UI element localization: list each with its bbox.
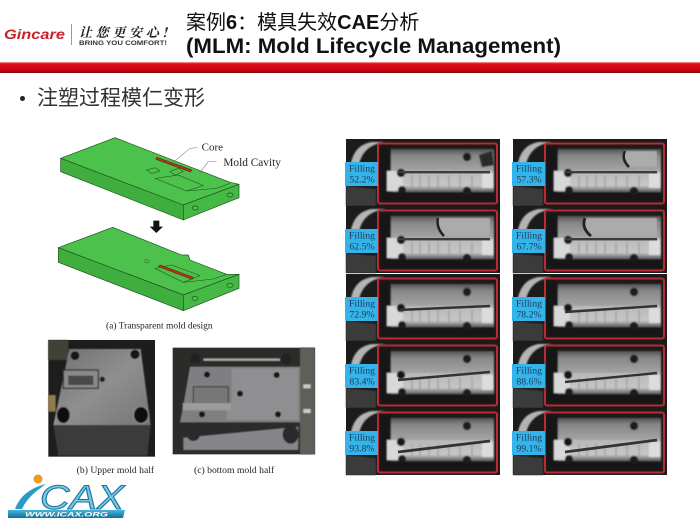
frame: filling 67.7%: Filling xyxy=(516,231,542,242)
frame: filling 99.1%: Filling xyxy=(516,433,542,444)
swoosh of the letter i xyxy=(15,484,46,509)
frame: filling 83.4% xyxy=(345,341,500,408)
photo: upper mold half xyxy=(48,340,155,457)
frame: filling 88.6% xyxy=(512,341,667,408)
frame: filling 52.2% xyxy=(345,139,500,206)
panel: filling sequence left column xyxy=(345,139,500,475)
frame: filling 72.9% xyxy=(345,274,500,341)
frame: filling 93.8%: 93.8% xyxy=(349,443,375,454)
url text: WWW.ICAX.ORG xyxy=(25,512,108,518)
frame: filling 57.3%: 57.3% xyxy=(516,174,542,185)
frame: filling 62.5% xyxy=(345,206,500,273)
frame: filling 57.3%: Filling xyxy=(516,164,542,175)
frame: filling 83.4%: Filling xyxy=(349,366,375,377)
label: mold cavity: Mold Cavity xyxy=(223,157,281,169)
logo: Gincare xyxy=(4,22,168,47)
frame: filling 72.9%: Filling xyxy=(349,299,375,310)
frame: filling 62.5%: 62.5% xyxy=(349,241,375,252)
photos: mold halves xyxy=(48,340,315,476)
title line 1: 案例6：模具失效CAE分析 xyxy=(186,11,419,34)
frame: filling 83.4%: 83.4% xyxy=(349,376,375,387)
frame: filling 67.7% xyxy=(512,206,667,273)
frame: filling 52.2%: Filling xyxy=(349,164,375,175)
frame: filling 88.6%: 88.6% xyxy=(516,376,542,387)
url bar xyxy=(8,510,125,518)
wordmark: CAX xyxy=(40,479,126,517)
frame: filling 99.1% xyxy=(512,408,667,475)
frame: filling 78.2%: 78.2% xyxy=(516,309,542,320)
logo slogan english: BRING YOU COMFORT! xyxy=(79,40,167,47)
orange ball xyxy=(34,474,42,484)
frame: filling 99.1%: 99.1% xyxy=(516,443,542,454)
bullet heading: 注塑过程模仁变形 xyxy=(37,87,205,110)
down arrow xyxy=(150,221,163,233)
frame: filling 72.9%: 72.9% xyxy=(349,309,375,320)
logo: ICAX xyxy=(8,474,126,518)
frame: filling 52.2%: 52.2% xyxy=(349,174,375,185)
label leader lines xyxy=(173,148,217,173)
frame: filling 78.2%: Filling xyxy=(516,299,542,310)
panel: filling sequence right column xyxy=(512,139,667,475)
frame: filling 57.3% xyxy=(512,139,667,206)
frame: filling 93.8% xyxy=(345,408,500,475)
mold with core below xyxy=(58,227,239,311)
frame: filling 67.7%: 67.7% xyxy=(516,241,542,252)
mold with core above xyxy=(61,138,239,220)
caption b: (b) Upper mold half xyxy=(77,465,155,476)
frame: filling 62.5%: Filling xyxy=(349,231,375,242)
diagram: transparent mold design xyxy=(58,138,281,332)
label: core: Core xyxy=(202,141,223,153)
caption a: (a) Transparent mold design xyxy=(106,321,213,332)
frame: filling 78.2% xyxy=(512,274,667,341)
title line 2: (MLM: Mold Lifecycle Management) xyxy=(186,34,561,58)
photo: bottom mold half xyxy=(173,348,315,454)
logo wordmark: Gincare xyxy=(4,27,66,42)
frame: filling 88.6%: Filling xyxy=(516,366,542,377)
caption c: (c) bottom mold half xyxy=(194,465,275,476)
logo slogan chinese: 让您更安心! xyxy=(79,22,168,41)
frame: filling 93.8%: Filling xyxy=(349,433,375,444)
title xyxy=(186,11,561,58)
red header bar xyxy=(0,62,700,73)
